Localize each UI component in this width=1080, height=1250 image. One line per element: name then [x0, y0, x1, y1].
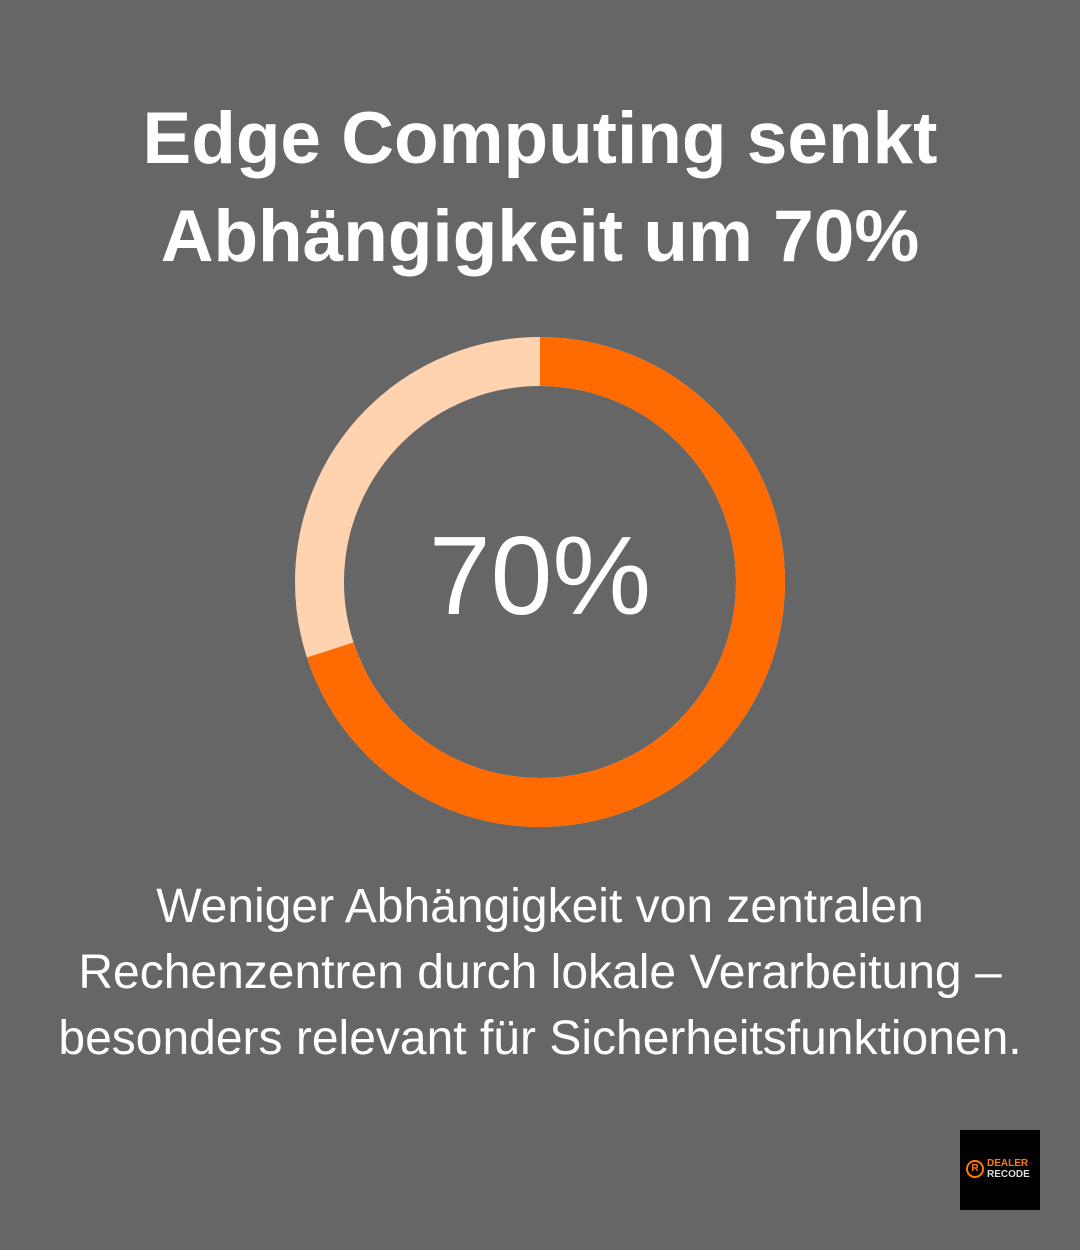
logo: DEALER: [987, 1158, 1028, 1169]
logo: R: [971, 1163, 979, 1174]
description: besonders relevant für Sicherheitsfunktionen.: [58, 1012, 1022, 1065]
title: Edge Computing senkt: [143, 98, 937, 179]
logo: RECODE: [987, 1169, 1030, 1180]
center value: 70%: [429, 514, 651, 638]
title: Abhängigkeit um 70%: [161, 196, 919, 277]
title: [143, 98, 937, 277]
description: [58, 880, 1022, 1065]
description: Weniger Abhängigkeit von zentralen: [156, 880, 924, 933]
description: Rechenzentren durch lokale Verarbeitung –: [78, 946, 1002, 999]
logo: [960, 1130, 1040, 1210]
